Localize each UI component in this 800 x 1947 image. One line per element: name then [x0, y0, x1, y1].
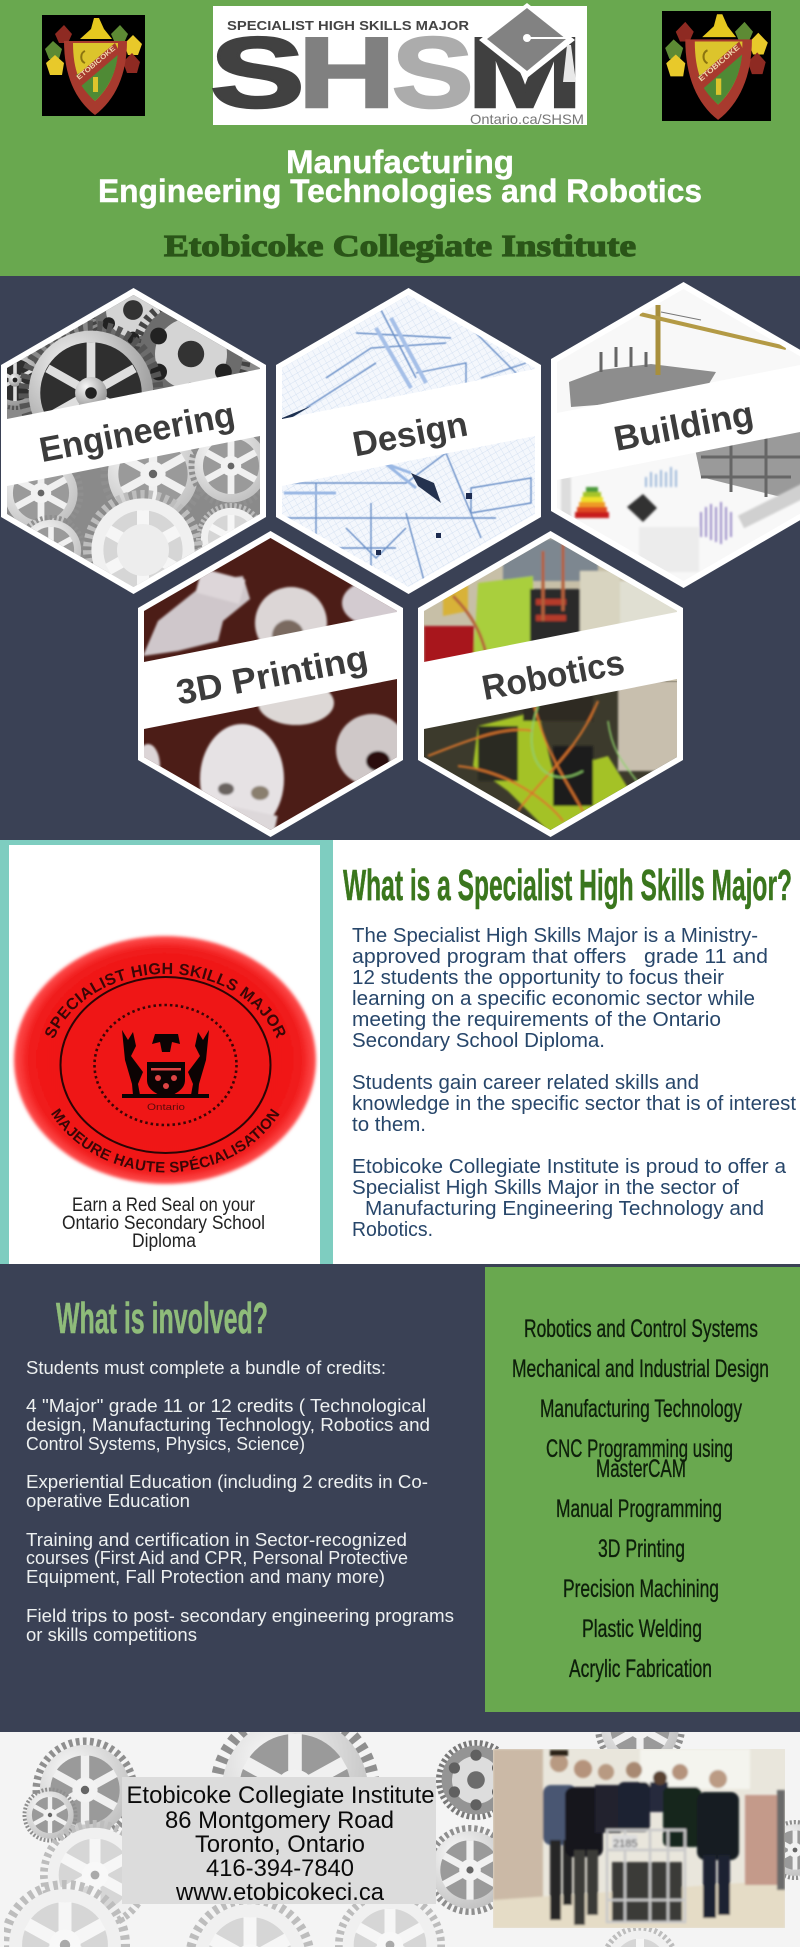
icon: red seal badge: MAJEURE HAUTE SPÉCIALISATION [51, 1108, 280, 1172]
hexagon: Building [551, 282, 800, 588]
body text: Etobicoke Collegiate Institute is proud to offer a [352, 1156, 787, 1178]
credits list: Equipment, Fall Protection and many more) [26, 1566, 385, 1587]
icon: school crest left [42, 15, 145, 116]
logo: SHSM: Ontario.ca/SHSM [470, 111, 584, 127]
hexagon: 3D Printing [136, 531, 408, 838]
credits list: 4 "Major" grade 11 or 12 credits ( Technological [26, 1395, 426, 1416]
body text: 12 students the opportunity to focus their [352, 967, 724, 989]
title: Engineering Technologies and Robotics [98, 173, 702, 209]
caption: Ontario Secondary School [62, 1213, 265, 1234]
caption [62, 1195, 265, 1252]
panel: course list [485, 1267, 800, 1712]
logo: SHSM: H [298, 17, 395, 129]
credits list: Control Systems, Physics, Science) [26, 1433, 305, 1454]
credits list [26, 1357, 454, 1645]
credits list: or skills competitions [26, 1624, 197, 1645]
body text: Students gain career related skills and [352, 1072, 699, 1094]
panel: course list: Plastic Welding [582, 1615, 702, 1643]
contact box: Etobicoke Collegiate Institute [126, 1782, 434, 1809]
panel: what is SHSM [333, 840, 800, 1264]
panel: course list: MasterCAM [596, 1455, 686, 1483]
icon: school crest right [662, 11, 771, 121]
team photo [493, 1749, 785, 1928]
school name: Etobicoke Collegiate Institute [164, 228, 636, 263]
contact box: www.etobicokeci.ca [175, 1879, 385, 1906]
logo: SHSM: S [392, 16, 473, 129]
credits list: Field trips to post- secondary engineering programs [26, 1605, 454, 1626]
body text: to them. [352, 1114, 426, 1136]
panel: what is involved [0, 1264, 800, 1732]
contact box: 86 Montgomery Road [165, 1807, 394, 1834]
logo: SHSM: S [210, 17, 305, 129]
gears background [4, 1732, 800, 1947]
heading: What is involved? [56, 1294, 268, 1343]
body text: Secondary School Diploma. [352, 1030, 605, 1052]
caption: Diploma [132, 1231, 196, 1252]
credits list: courses (First Aid and CPR, Personal Protective [26, 1547, 408, 1568]
hexagon: Robotics: Robotics [479, 643, 627, 708]
panel: specialties [0, 269, 800, 840]
team photo: 2185 [613, 1838, 637, 1850]
body text [352, 925, 796, 1241]
credits list: Training and certification in Sector-recognized [26, 1529, 407, 1550]
body text: Manufacturing Engineering Technology and [365, 1198, 764, 1220]
title [98, 144, 702, 209]
body text: Specialist High Skills Major in the sector of [352, 1177, 739, 1199]
hexagon: Engineering [1, 288, 266, 594]
contact box [122, 1777, 436, 1906]
body text: Robotics. [352, 1219, 433, 1241]
icon: red seal badge: Ontario [147, 1102, 185, 1112]
hexagon: Design [276, 288, 541, 594]
icon: red seal badge: SPECIALIST HIGH SKILLS MAJOR [45, 962, 286, 1039]
panel: course list: 3D Printing [598, 1535, 685, 1563]
logo: SHSM: SPECIALIST HIGH SKILLS MAJOR [227, 19, 469, 33]
body text: meeting the requirements of the Ontario [352, 1009, 721, 1031]
hexagon: Engineering: Engineering [36, 395, 238, 470]
body text: approved program that offers grade 11 and [352, 946, 768, 968]
panel: course list: Manual Programming [556, 1495, 722, 1523]
credits list: Experiential Education (including 2 credits in Co- [26, 1471, 428, 1492]
hexagon: Design: Design [349, 405, 471, 464]
logo: SHSM [210, 3, 587, 129]
hexagon: 3D Printing: 3D Printing [173, 638, 371, 713]
credits list: Students must complete a bundle of credits: [26, 1357, 386, 1378]
icon: red seal badge [12, 934, 318, 1186]
logo: SHSM: M [467, 16, 583, 128]
panel: course list: Acrylic Fabrication [569, 1655, 712, 1683]
body text: The Specialist High Skills Major is a Ministry- [352, 925, 758, 947]
hexagon: Robotics [418, 531, 683, 837]
caption: Earn a Red Seal on your [72, 1195, 256, 1216]
panel: red seal [0, 840, 333, 1264]
body text: knowledge in the specific sector that is of interest [352, 1093, 796, 1115]
body text: learning on a specific economic sector while [352, 988, 755, 1010]
credits list: design, Manufacturing Technology, Robotics and [26, 1414, 430, 1435]
panel: header [0, 0, 800, 276]
contact box: Toronto, Ontario [195, 1831, 365, 1858]
panel: footer [0, 1732, 800, 1947]
hexagon: Building: Building [611, 394, 756, 459]
title: Manufacturing [286, 144, 514, 180]
contact box: 416-394-7840 [206, 1855, 354, 1882]
credits list: operative Education [26, 1490, 190, 1511]
panel: course list: Precision Machining [563, 1575, 719, 1603]
